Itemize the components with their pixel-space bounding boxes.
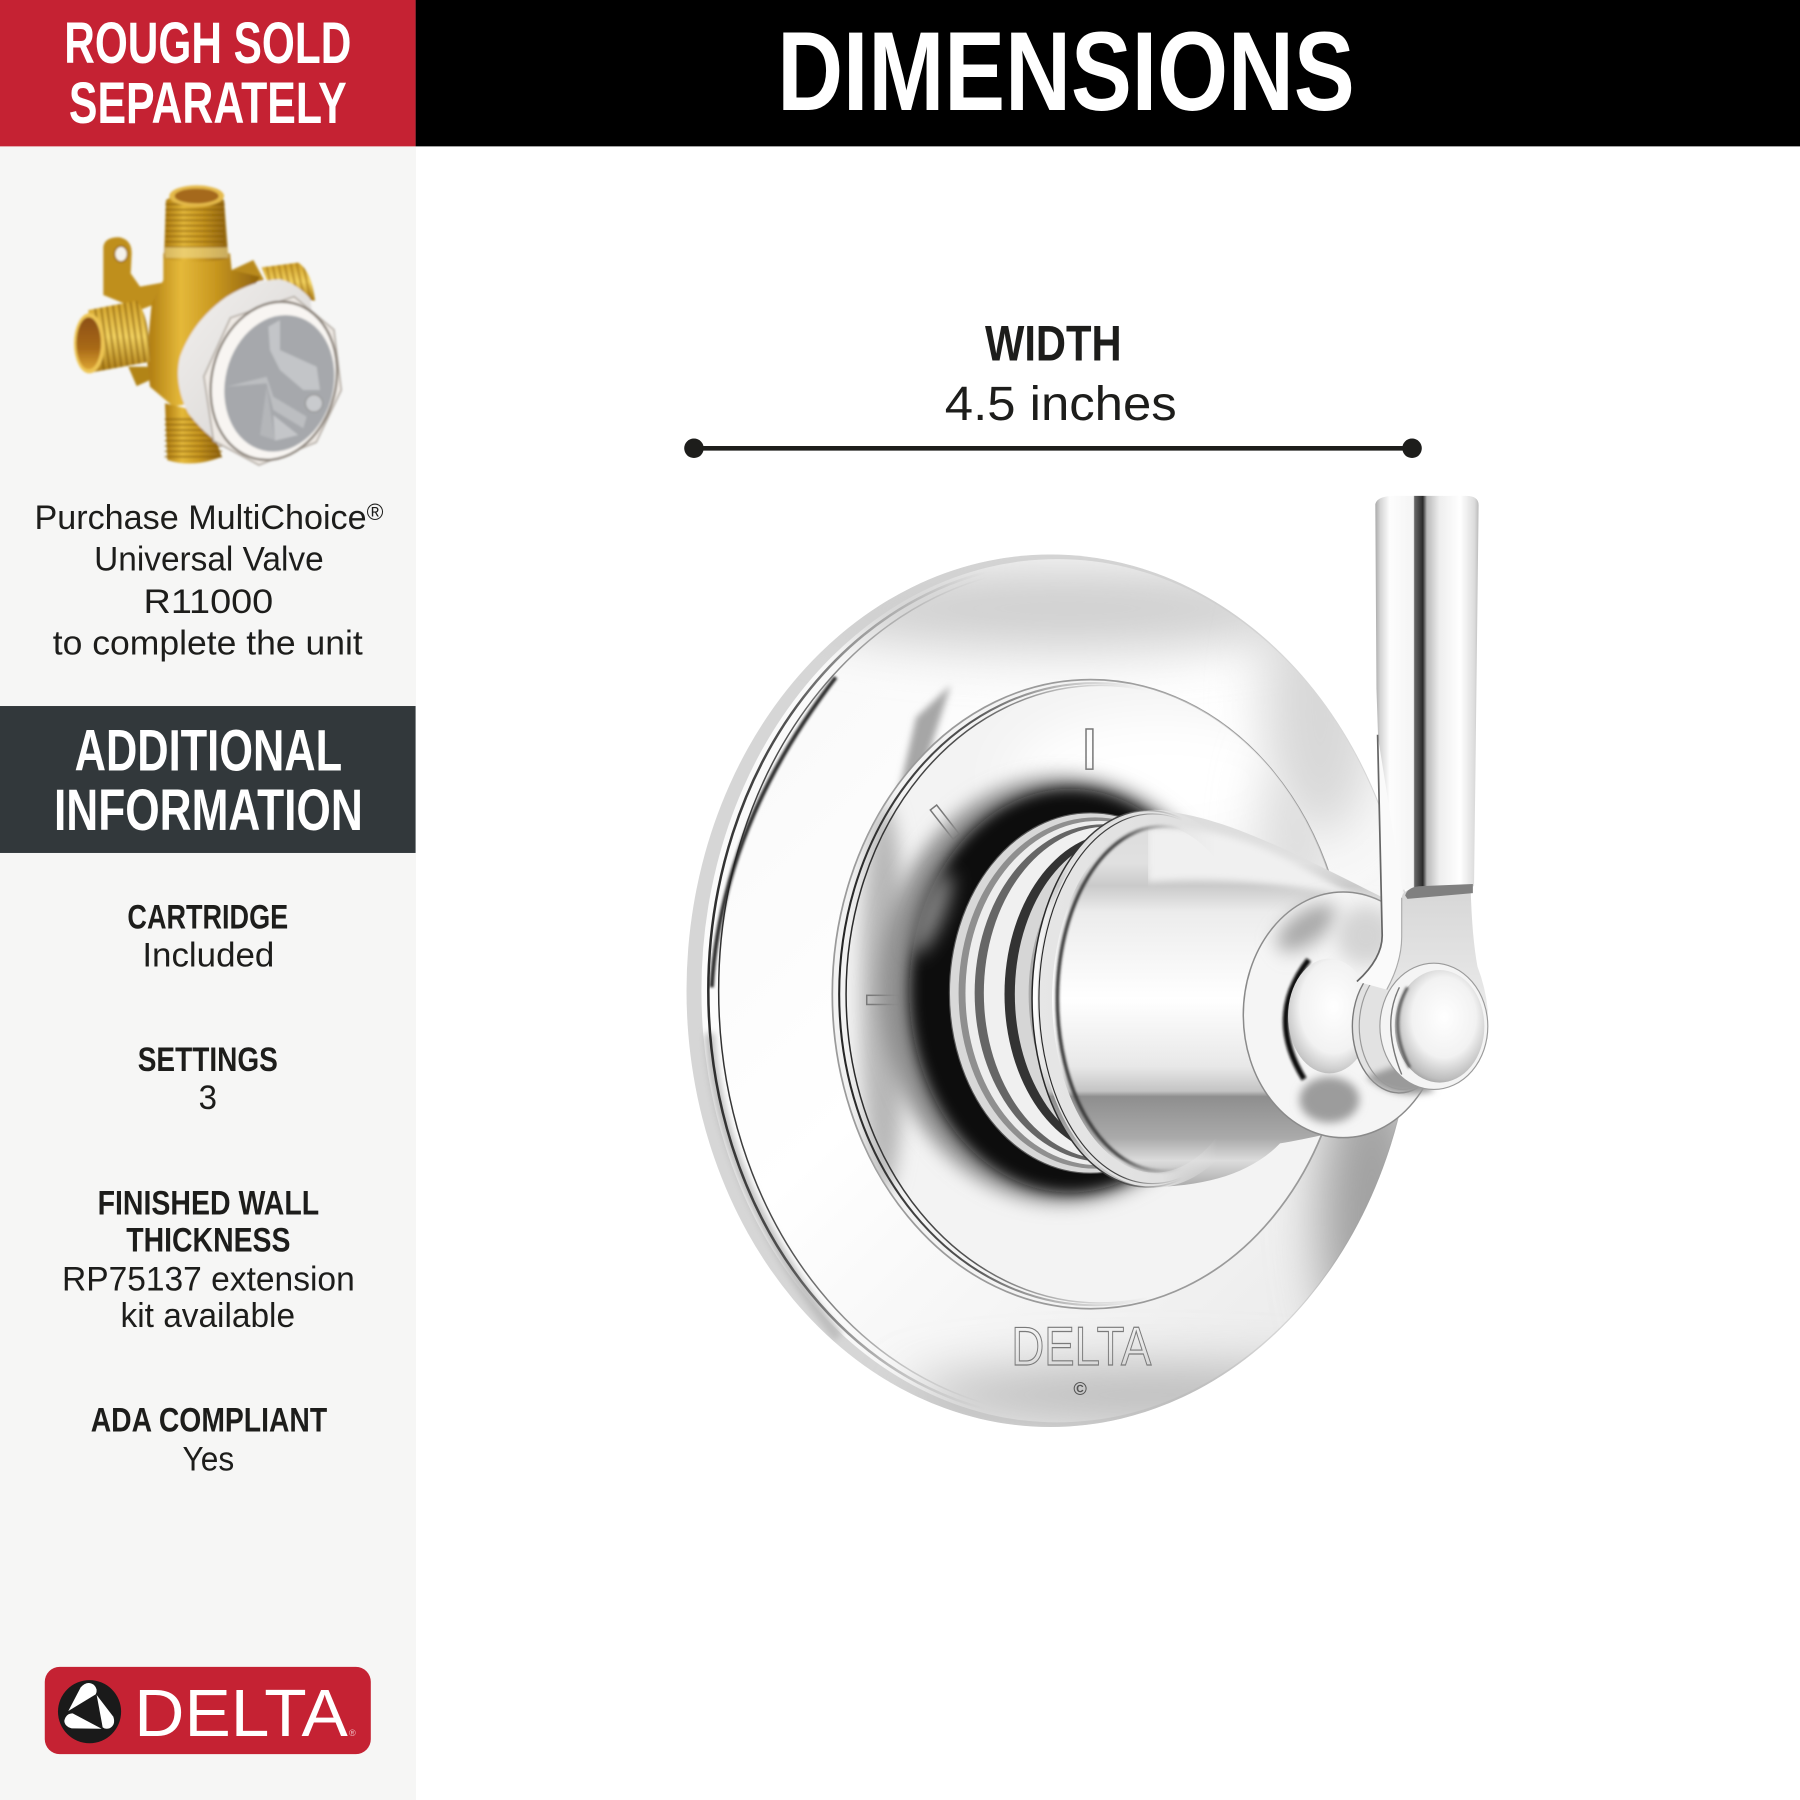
right side pipe <box>232 260 316 301</box>
spec: settings: 3 <box>199 1079 217 1117</box>
spec: cartridge: Included <box>142 937 274 975</box>
text: width value: 4.5 inches <box>945 377 1177 431</box>
text block: purchase valve note: ® <box>367 499 384 525</box>
text block: purchase valve note: Universal Valve <box>94 541 324 579</box>
heading: additional information <box>0 706 416 853</box>
heading: additional information: ADDITIONAL <box>75 718 342 783</box>
threaded collar rings <box>949 813 1240 1173</box>
spec: ada compliant: ADA COMPLIANT <box>91 1402 327 1440</box>
text block: purchase valve note: to complete the unit <box>53 624 363 662</box>
panel: sidebar background <box>0 0 416 1800</box>
header bar: dimensions: DIMENSIONS <box>777 8 1355 134</box>
hub <box>1243 892 1446 1138</box>
engraved mark: © <box>1073 1378 1087 1399</box>
header bar: dimensions <box>416 0 1800 146</box>
logo: delta: DELTA <box>134 1677 348 1751</box>
recess shadow <box>881 776 1243 1203</box>
spec: finished wall thickness: FINISHED WALL <box>98 1185 319 1223</box>
spec: settings <box>138 1041 278 1117</box>
spec: finished wall thickness: THICKNESS <box>126 1221 290 1259</box>
heading: additional information: INFORMATION <box>54 778 363 843</box>
engraved logo: DELTA <box>1011 1315 1152 1377</box>
banner: rough sold separately <box>0 0 416 146</box>
spec: ada compliant <box>91 1402 327 1479</box>
spec: finished wall thickness: RP75137 extension <box>62 1260 355 1298</box>
left side pipe <box>74 301 150 386</box>
bottom pipe <box>165 403 222 463</box>
banner: rough sold separately: SEPARATELY <box>69 71 347 136</box>
product: chrome diverter trim <box>687 496 1488 1427</box>
text block: purchase valve note: Purchase MultiChoice <box>34 499 369 537</box>
escutcheon plate <box>687 554 1424 1427</box>
grey plug interior <box>210 303 348 463</box>
tick marks <box>867 729 1093 1004</box>
top pipe <box>164 185 228 262</box>
spec: ada compliant: Yes <box>183 1441 234 1479</box>
product: brass rough valve <box>74 185 360 480</box>
lever handle <box>1357 496 1488 1039</box>
text block: purchase valve note <box>34 499 384 662</box>
bracket tab <box>103 237 168 310</box>
spec: settings: SETTINGS <box>138 1041 278 1079</box>
banner: rough sold separately: ROUGH SOLD <box>64 11 351 76</box>
logo: delta <box>45 1667 371 1754</box>
text block: purchase valve note: R11000 <box>144 583 273 621</box>
spec: cartridge <box>127 899 288 975</box>
spec: finished wall thickness <box>62 1185 355 1335</box>
spec: cartridge: CARTRIDGE <box>127 899 288 937</box>
white collar <box>178 279 327 461</box>
spec: finished wall thickness: kit available <box>121 1297 295 1335</box>
reflection streak <box>884 685 951 855</box>
heading: width: WIDTH <box>985 314 1122 371</box>
dimension line with end dots <box>684 439 1422 458</box>
inner raised ring <box>832 680 1353 1309</box>
logo: delta: ® <box>349 1728 356 1738</box>
knob cone <box>1032 810 1383 1187</box>
valve body <box>147 253 260 407</box>
lever cap <box>1380 963 1488 1089</box>
chrome bezel <box>186 280 360 480</box>
